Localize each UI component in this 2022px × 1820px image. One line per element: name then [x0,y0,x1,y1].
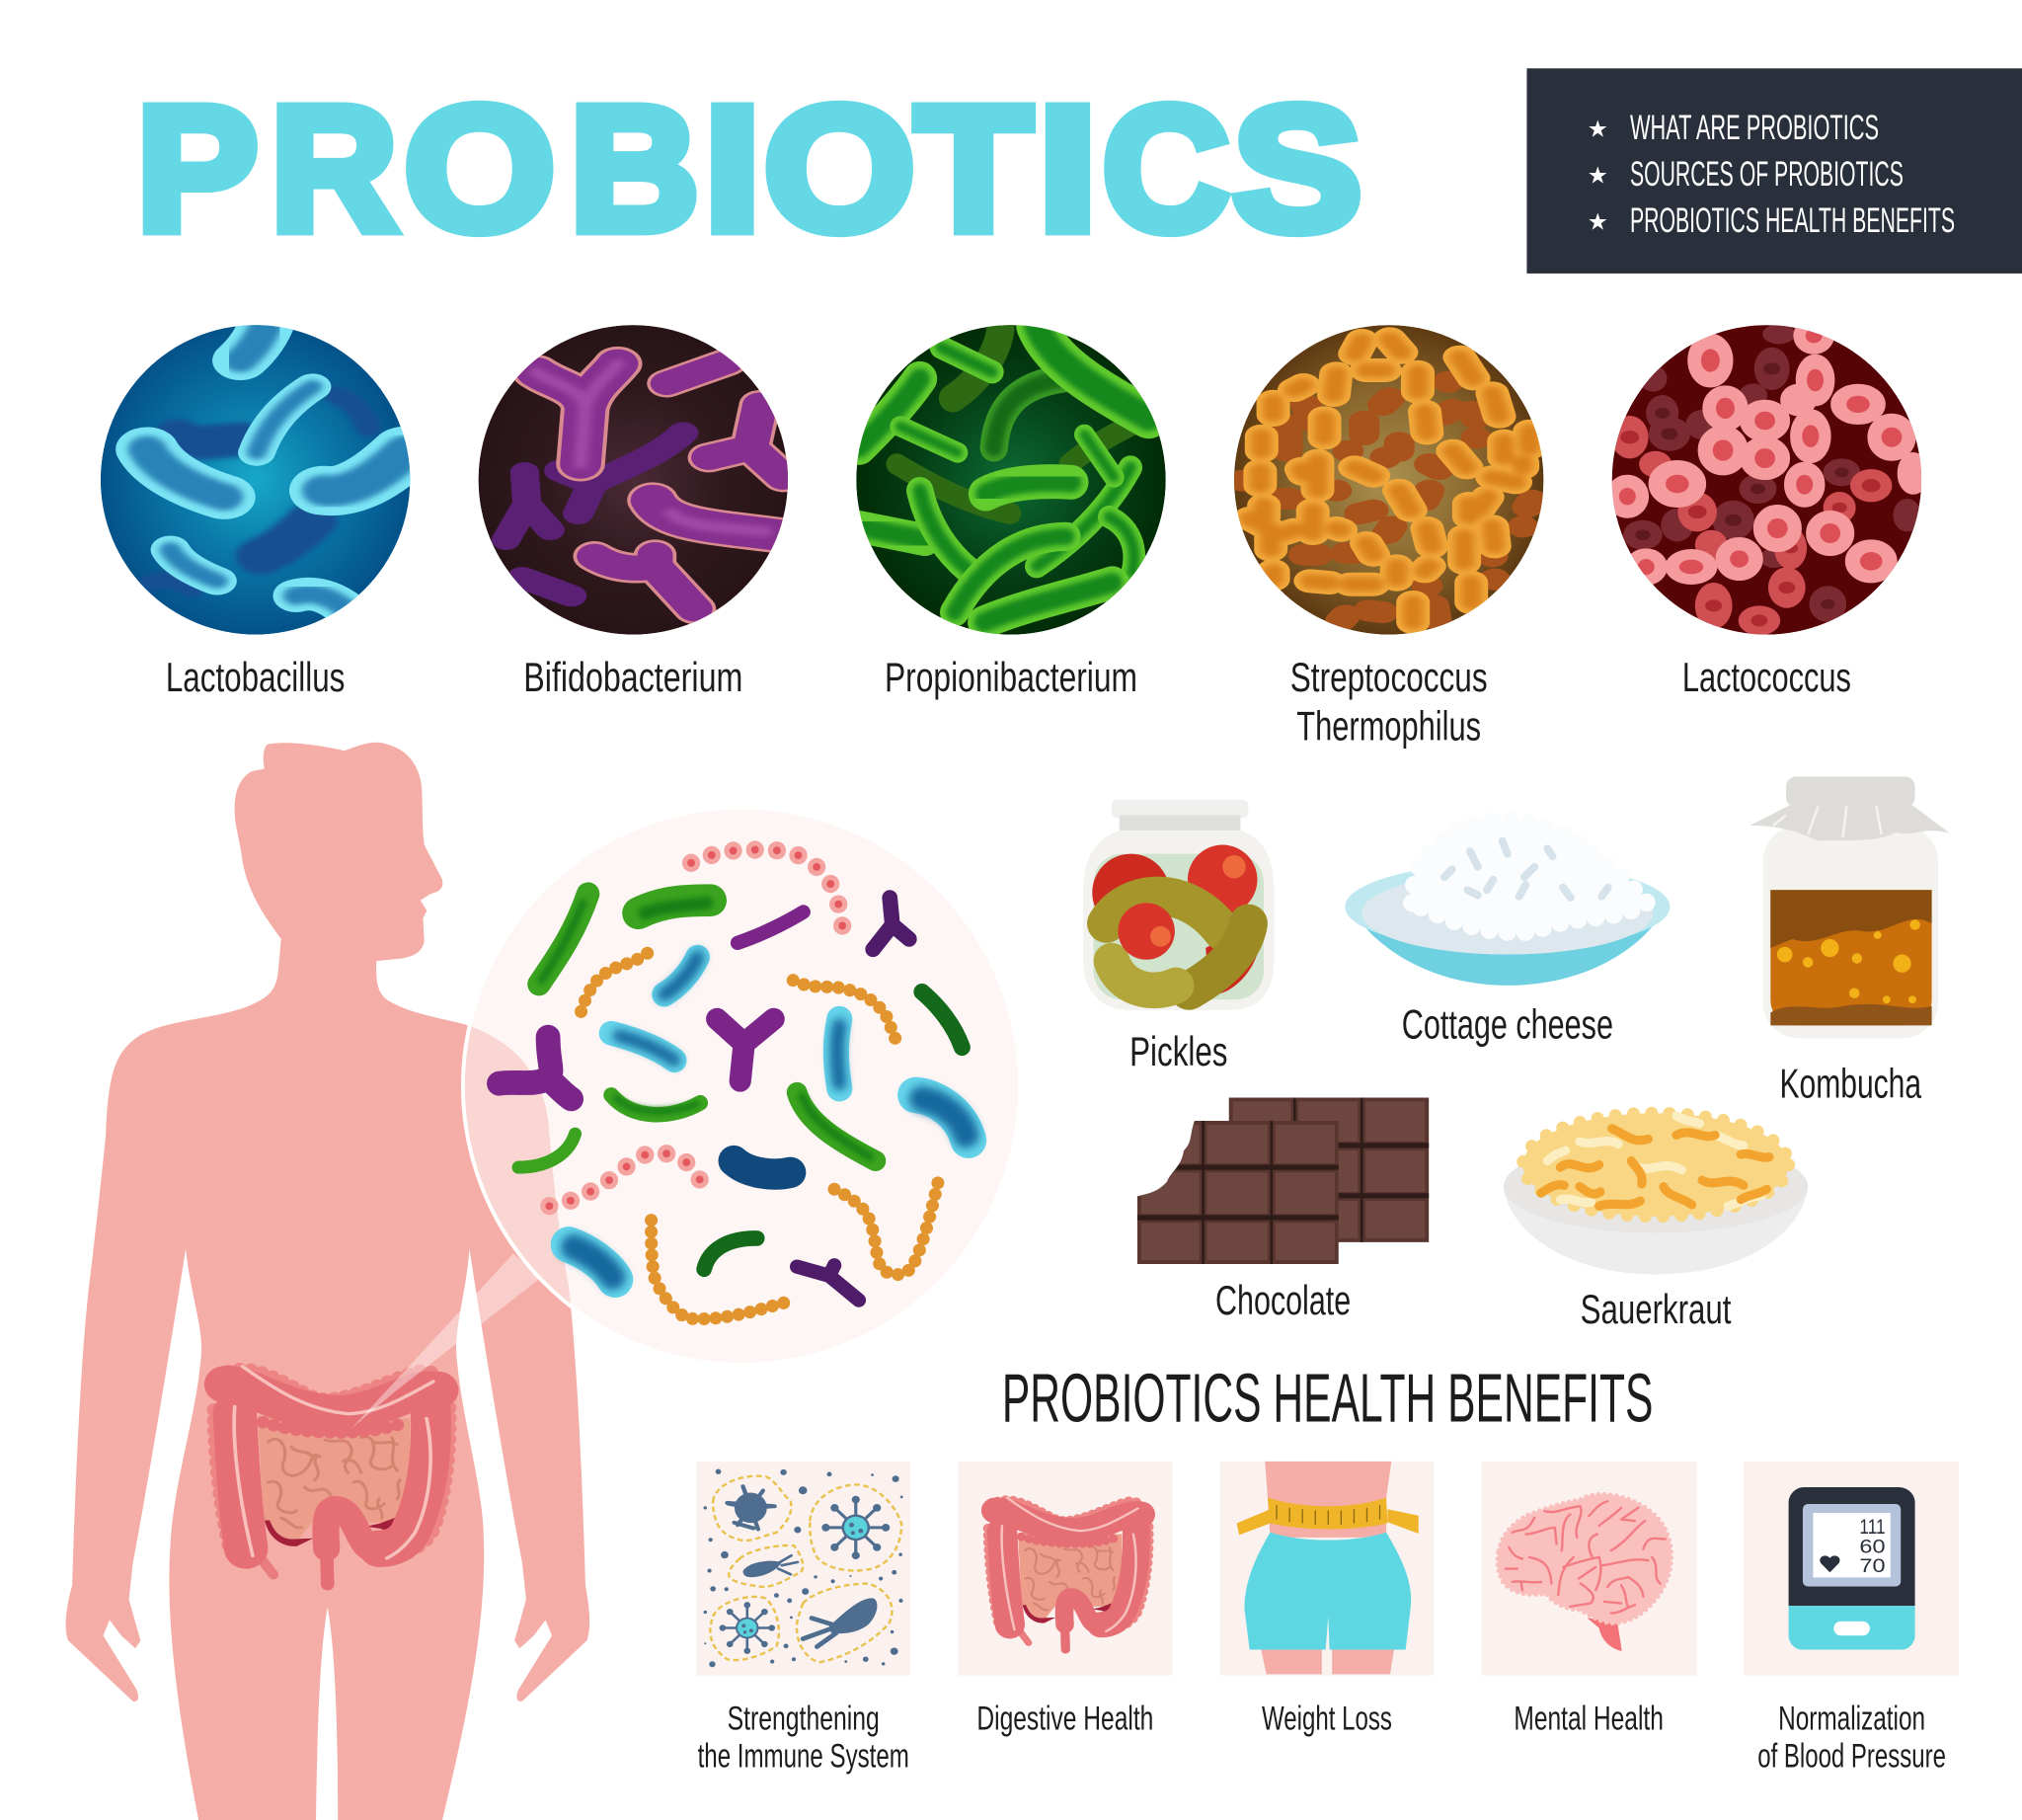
title: R [271,70,397,268]
icon: propionibacterium circle [856,325,1166,635]
benefit labels: Weight Loss [1262,1701,1392,1738]
bacteria labels: Lactococcus [1682,654,1851,700]
food: sauerkraut bowl [1504,1113,1808,1274]
panel: magnified bacteria circle [463,808,1020,1365]
icon: bifidobacterium circle [479,325,788,635]
title: O [404,70,555,268]
label: pickles: Pickles [1129,1028,1227,1074]
label: sauerkraut: Sauerkraut [1581,1286,1732,1332]
icon: lactococcus circle [1608,319,1927,635]
title: C [1103,70,1229,268]
icon: streptococcus circle [1234,325,1543,635]
benefit tile: blood pressure: 60 [1859,1537,1886,1558]
bacteria labels: Lactobacillus [166,654,345,700]
pink chain 2 [549,1152,711,1206]
food: kombucha jar [1750,776,1950,1038]
bacteria labels [166,654,1851,750]
benefit tile: blood pressure [1744,1462,1959,1676]
panel: contents list: ★ [1588,209,1608,235]
benefit labels [698,1701,1946,1775]
panel: contents list: WHAT ARE PROBIOTICS [1630,109,1879,147]
panel: contents list: ★ [1588,116,1608,141]
label: chocolate: Chocolate [1215,1277,1351,1323]
blue bacteria cores [574,957,966,1277]
pink chain [691,849,843,931]
blue bacteria [569,957,969,1280]
benefit tile: digestive [958,1462,1172,1676]
title: I [704,70,761,268]
benefit labels: Normalization [1778,1701,1925,1738]
panel: contents list: ★ [1588,162,1608,188]
food: chocolate bars [1134,1098,1429,1264]
green bacteria [518,894,876,1167]
benefit tile: immune system [696,1462,910,1676]
benefit labels: Mental Health [1514,1701,1664,1738]
bacteria labels: Bifidobacterium [523,654,742,700]
benefit tile: weight loss [1220,1462,1434,1676]
navy bacterium [734,1161,791,1174]
title: I [1038,70,1098,268]
label: kombucha: Kombucha [1779,1061,1922,1107]
purple bacteria [499,911,804,1099]
bacteria labels: Streptococcus [1290,654,1488,700]
title: T [915,70,1032,268]
benefit labels: of Blood Pressure [1757,1737,1946,1775]
benefit labels: Digestive Health [976,1701,1153,1738]
food: cottage cheese bowl [1345,821,1670,986]
icon: large intestine in body [214,1367,449,1584]
bacteria labels: Propionibacterium [885,654,1137,700]
benefit tile: blood pressure: 111 [1859,1516,1886,1539]
panel: contents list [1526,68,2022,274]
title: S [1233,70,1361,268]
dark green bacteria [704,991,962,1269]
bacteria labels: Thermophilus [1296,703,1481,750]
label: cottage cheese: Cottage cheese [1402,1000,1613,1047]
food: pickles jar [1083,800,1274,1010]
green bacteria cores [542,903,871,1157]
benefit labels: Strengthening [728,1701,880,1738]
title: P [136,70,258,268]
benefit labels: the Immune System [698,1737,909,1775]
dark purple bacteria [797,898,909,1301]
benefit tile: blood pressure: 70 [1859,1555,1886,1577]
orange chains [579,953,939,1319]
benefit tile: mental health [1482,1462,1697,1676]
title [136,70,1361,268]
title: B [570,70,699,268]
beam from intestine to magnifier [350,1254,542,1429]
icon: lactobacillus circle [101,319,410,635]
body silhouette [66,743,589,1820]
title: O [764,70,915,268]
